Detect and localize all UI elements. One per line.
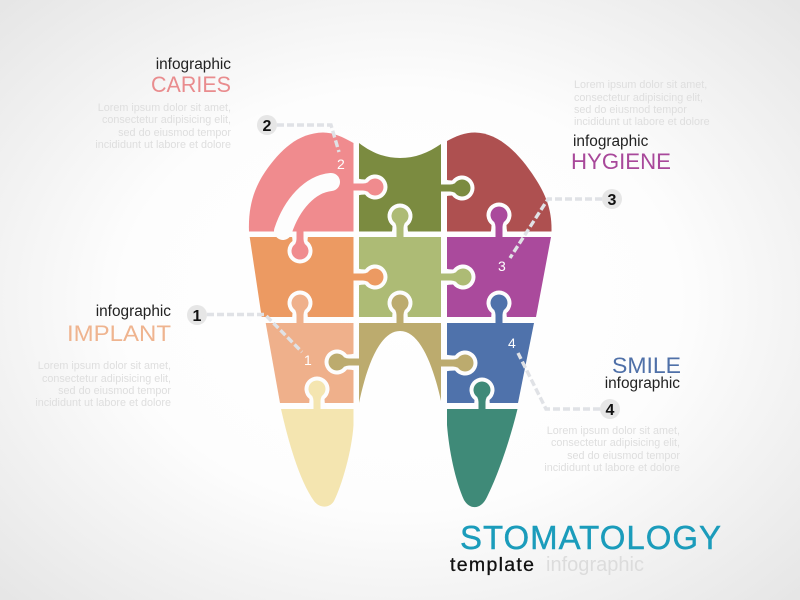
knob: pink into olive: [350, 174, 388, 200]
tooth puzzle: [249, 132, 552, 507]
text block: hygiene: incididunt ut labore et dolore: [574, 116, 710, 128]
subtitle: template: template: [450, 554, 534, 576]
badge 4: 4: [606, 402, 615, 419]
knob: green into purple: [437, 264, 476, 290]
text block: implant: IMPLANT: [67, 321, 171, 346]
text block: implant: incididunt ut labore et dolore: [35, 397, 171, 409]
text block: smile: Lorem ipsum dolor sit amet,: [547, 425, 680, 437]
piece: orange: [250, 237, 354, 317]
text block: caries: sed do eiusmod tempor: [118, 127, 231, 139]
text block: smile: SMILE: [612, 353, 681, 378]
tooth number 2: 2: [337, 156, 345, 172]
text block: implant: infographic: [96, 303, 171, 320]
text block: hygiene: consectetur adipisicing elit,: [574, 92, 703, 104]
piece: yellow root: [281, 409, 354, 507]
knob: green into olive: [388, 204, 412, 241]
piece: purple: [447, 237, 551, 317]
text block: hygiene: infographic: [573, 133, 649, 150]
white arch highlight: [283, 182, 331, 231]
text block: caries: incididunt ut labore et dolore: [95, 139, 231, 151]
text block: smile: consectetur adipisicing elit,: [551, 437, 680, 449]
text block: hygiene: [571, 79, 710, 174]
text block: caries: infographic: [156, 56, 231, 73]
badge 3: [602, 189, 622, 209]
knob: tan into peach: [324, 350, 363, 374]
text block: caries: consectetur adipisicing elit,: [102, 114, 231, 126]
text block: smile: infographic: [605, 375, 680, 392]
piece: blue: [447, 323, 534, 403]
text block: caries: Lorem ipsum dolor sit amet,: [98, 102, 231, 114]
piece: green: [359, 237, 441, 317]
badge 2: 2: [263, 118, 272, 135]
badge 3: 3: [608, 192, 617, 209]
badge 1: 1: [193, 308, 202, 325]
piece: olive crown: [359, 143, 441, 232]
badge 1: [187, 305, 207, 325]
title: STOMATOLOGY: [460, 519, 721, 556]
connector 3: [510, 199, 602, 258]
tooth number 3: 3: [498, 258, 506, 274]
text block: smile: incididunt ut labore et dolore: [544, 462, 680, 474]
knob: peach into orange: [288, 290, 312, 327]
knob: yellow into peach: [304, 376, 330, 413]
text block: smile: sed do eiusmod tempor: [567, 450, 680, 462]
knob: teal into blue: [470, 378, 494, 413]
piece: tan: [359, 323, 441, 403]
knob: orange into green: [350, 264, 388, 290]
badge 4: [600, 399, 620, 419]
subtitle: infographic: infographic: [546, 554, 644, 576]
knob: olive into red: [437, 176, 474, 200]
connector 1: [207, 314, 302, 352]
text block: implant: consectetur adipisicing elit,: [42, 373, 171, 385]
piece: teal root: [447, 409, 518, 507]
text block: caries: CARIES: [151, 72, 231, 97]
piece: red crown: [447, 132, 552, 232]
text block: hygiene: sed do eiusmod tempor: [574, 104, 687, 116]
text block: caries: [95, 56, 231, 151]
tooth number 1: 1: [304, 352, 312, 368]
knob: tan into blue: [437, 350, 478, 376]
text block: hygiene: Lorem ipsum dolor sit amet,: [574, 79, 707, 91]
text block: implant: Lorem ipsum dolor sit amet,: [38, 360, 171, 372]
piece: peach: [266, 323, 354, 403]
piece: caries pink: [249, 132, 354, 232]
tooth number 4: 4: [508, 335, 516, 351]
text block: smile: [544, 353, 681, 474]
badge 2: [257, 115, 277, 135]
knob: tan into green: [388, 290, 412, 327]
text block: implant: [35, 303, 171, 409]
text block: implant: sed do eiusmod tempor: [58, 385, 171, 397]
connector 4: [518, 353, 600, 409]
connector 2: [277, 125, 339, 152]
text block: hygiene: HYGIENE: [571, 149, 671, 174]
knob: pink into orange: [288, 228, 312, 264]
knob: purple into red: [486, 202, 512, 241]
knob: blue into purple: [486, 290, 512, 327]
